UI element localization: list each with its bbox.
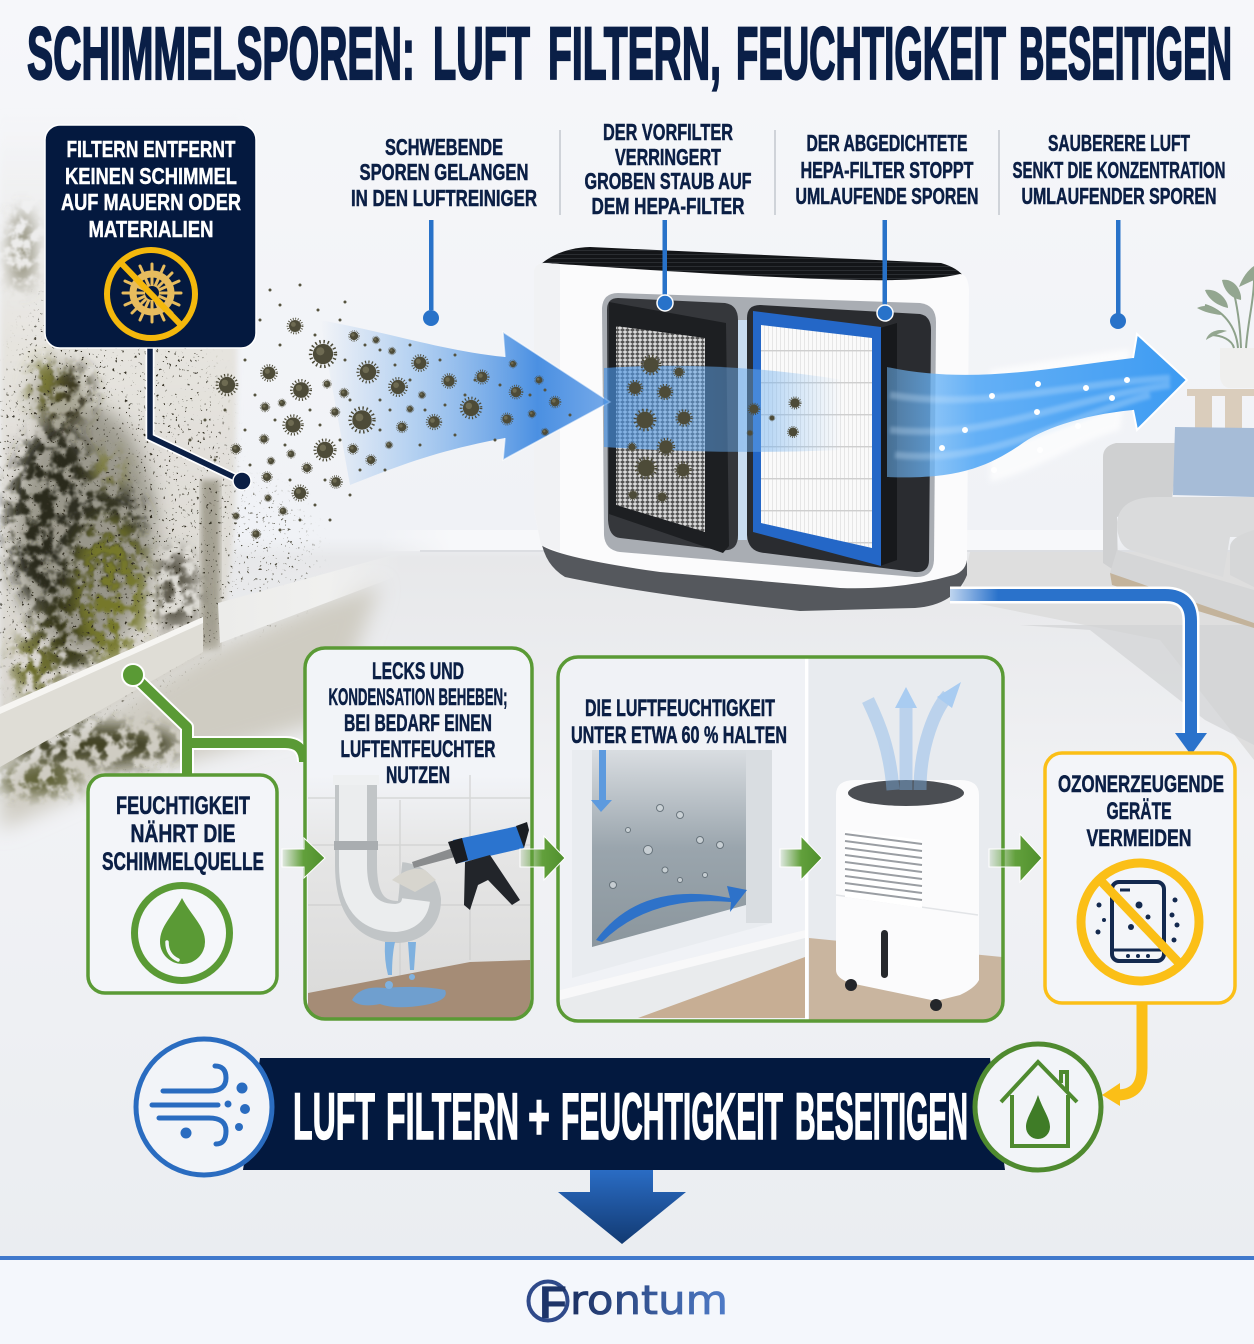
pre-filter: [609, 302, 729, 553]
air stream through filters: [604, 366, 843, 452]
callout: filtering does not remove mold: [45, 125, 256, 490]
purifier top vent: [541, 247, 964, 285]
summary banner: FILTERN: [386, 1079, 519, 1153]
panel heading: FEUCHTIGKEIT: [116, 792, 250, 820]
label: pre-filter: DER VORFILTER: [603, 119, 733, 145]
title: [27, 12, 1232, 95]
panel heading: NÄHRT DIE: [130, 820, 236, 848]
panel: moisture feeds mold: [88, 775, 277, 993]
panel heading: GERÄTE: [1106, 798, 1172, 825]
panel: avoid ozone generators: [1045, 753, 1235, 1003]
panel: humidity under 60 percent: [558, 657, 1003, 1021]
floor with baseboard near mold: [0, 553, 400, 830]
logo: Frontum: rontum: [570, 1278, 728, 1324]
label: HEPA filter: UMLAUFENDE SPOREN: [796, 183, 978, 209]
panel heading: [571, 695, 787, 749]
spore air stream arrow: [320, 320, 610, 485]
panel heading: [328, 658, 508, 789]
panel heading: LECKS UND: [372, 658, 464, 685]
green connector lines: [122, 664, 304, 775]
mold wall: [0, 110, 310, 780]
label: spores enter: SCHWEBENDE: [385, 134, 503, 160]
summary banner: LUFT: [293, 1079, 375, 1153]
illustration: window with condensation: [560, 750, 805, 1018]
logo: Frontum: F: [539, 1276, 567, 1328]
illustration: dehumidifier: [809, 658, 1002, 1020]
panel heading: [1058, 771, 1224, 852]
logo: Frontum: [528, 1276, 728, 1328]
panel heading: [102, 792, 264, 876]
label: HEPA filter: [796, 130, 978, 209]
label: spores enter: [351, 134, 537, 211]
title: LUFT: [433, 12, 530, 95]
callout text: AUF MAUERN ODER: [61, 189, 241, 215]
yellow connector arrow: [1102, 1003, 1142, 1106]
HEPA filter: [753, 311, 897, 566]
down arrow: [558, 1170, 686, 1244]
panel heading: VERMEIDEN: [1086, 825, 1192, 852]
clean air arrow: [887, 334, 1187, 482]
summary banner: BESEITIGEN: [795, 1079, 968, 1153]
front baseboard: [0, 617, 203, 767]
panel divider: [805, 658, 808, 1020]
top labels: [351, 119, 1226, 219]
air purifier: [534, 247, 969, 611]
panel heading: KONDENSATION BEHEBEN;: [328, 684, 508, 711]
label: HEPA filter: DER ABGEDICHTETE: [806, 130, 968, 156]
icon: air flow circle: [136, 1039, 272, 1175]
icon: no ozone device: [1081, 863, 1199, 981]
icon: no mold: [107, 250, 195, 338]
summary banner: FEUCHTIGKEIT: [561, 1079, 783, 1153]
callout text: KEINEN SCHIMMEL: [65, 163, 237, 189]
label: spores enter: SPOREN GELANGEN: [360, 159, 528, 185]
callout text: MATERIALIEN: [88, 216, 214, 242]
label: pre-filter: DEM HEPA-FILTER: [592, 193, 745, 219]
callout text: [61, 136, 241, 242]
summary banner: +: [528, 1079, 550, 1153]
label: pre-filter: [584, 119, 752, 219]
panel heading: NUTZEN: [386, 762, 450, 789]
icon: water drop: [134, 886, 230, 980]
illustration: leaking pipe and caulking gun: [308, 775, 530, 1018]
room backdrop: [380, 530, 1254, 760]
callout text: FILTERN ENTFERNT: [66, 136, 236, 162]
purifier body: [534, 263, 969, 588]
title: FILTERN,: [548, 12, 721, 95]
filter chamber: [602, 293, 936, 577]
blue connector arrow to ozone panel: [950, 595, 1207, 755]
panel heading: DIE LUFTFEUCHTIGKEIT: [585, 695, 775, 722]
spores trapped on pre-filter: [628, 356, 801, 502]
panel heading: BEI BEDARF EINEN: [344, 710, 492, 737]
green flow arrows: [282, 834, 1042, 882]
footer: [0, 1256, 1254, 1344]
room decor: plant, side table, sofa: [1103, 266, 1254, 628]
summary banner: [243, 1058, 1005, 1170]
panel heading: LUFTENTFEUCHTER: [340, 736, 496, 763]
label: HEPA filter: HEPA-FILTER STOPPT: [800, 157, 974, 183]
panel: fix leaks: [305, 648, 532, 1019]
condensation arrows: [591, 750, 747, 942]
panel heading: SCHIMMELQUELLE: [102, 848, 264, 876]
airborne spores: [190, 285, 801, 539]
purifier base: [541, 540, 967, 611]
callout box: [45, 125, 256, 348]
callout leader: [150, 345, 251, 490]
panel heading: UNTER ETWA 60 % HALTEN: [571, 722, 787, 749]
label: cleaner air: [1012, 130, 1226, 209]
label: spores enter: IN DEN LUFTREINIGER: [351, 185, 537, 211]
corner shadow: [201, 480, 220, 650]
blue leader lines: [423, 220, 1126, 329]
dry air arrows: [868, 695, 948, 790]
back baseboard: [218, 553, 400, 643]
label: cleaner air: SAUBERERE LUFT: [1048, 130, 1190, 156]
icon: house with water drop: [975, 1044, 1101, 1170]
title: SCHIMMELSPOREN:: [27, 12, 415, 95]
label: pre-filter: VERRINGERT: [615, 144, 721, 170]
label: pre-filter: GROBEN STAUB AUF: [584, 168, 752, 194]
